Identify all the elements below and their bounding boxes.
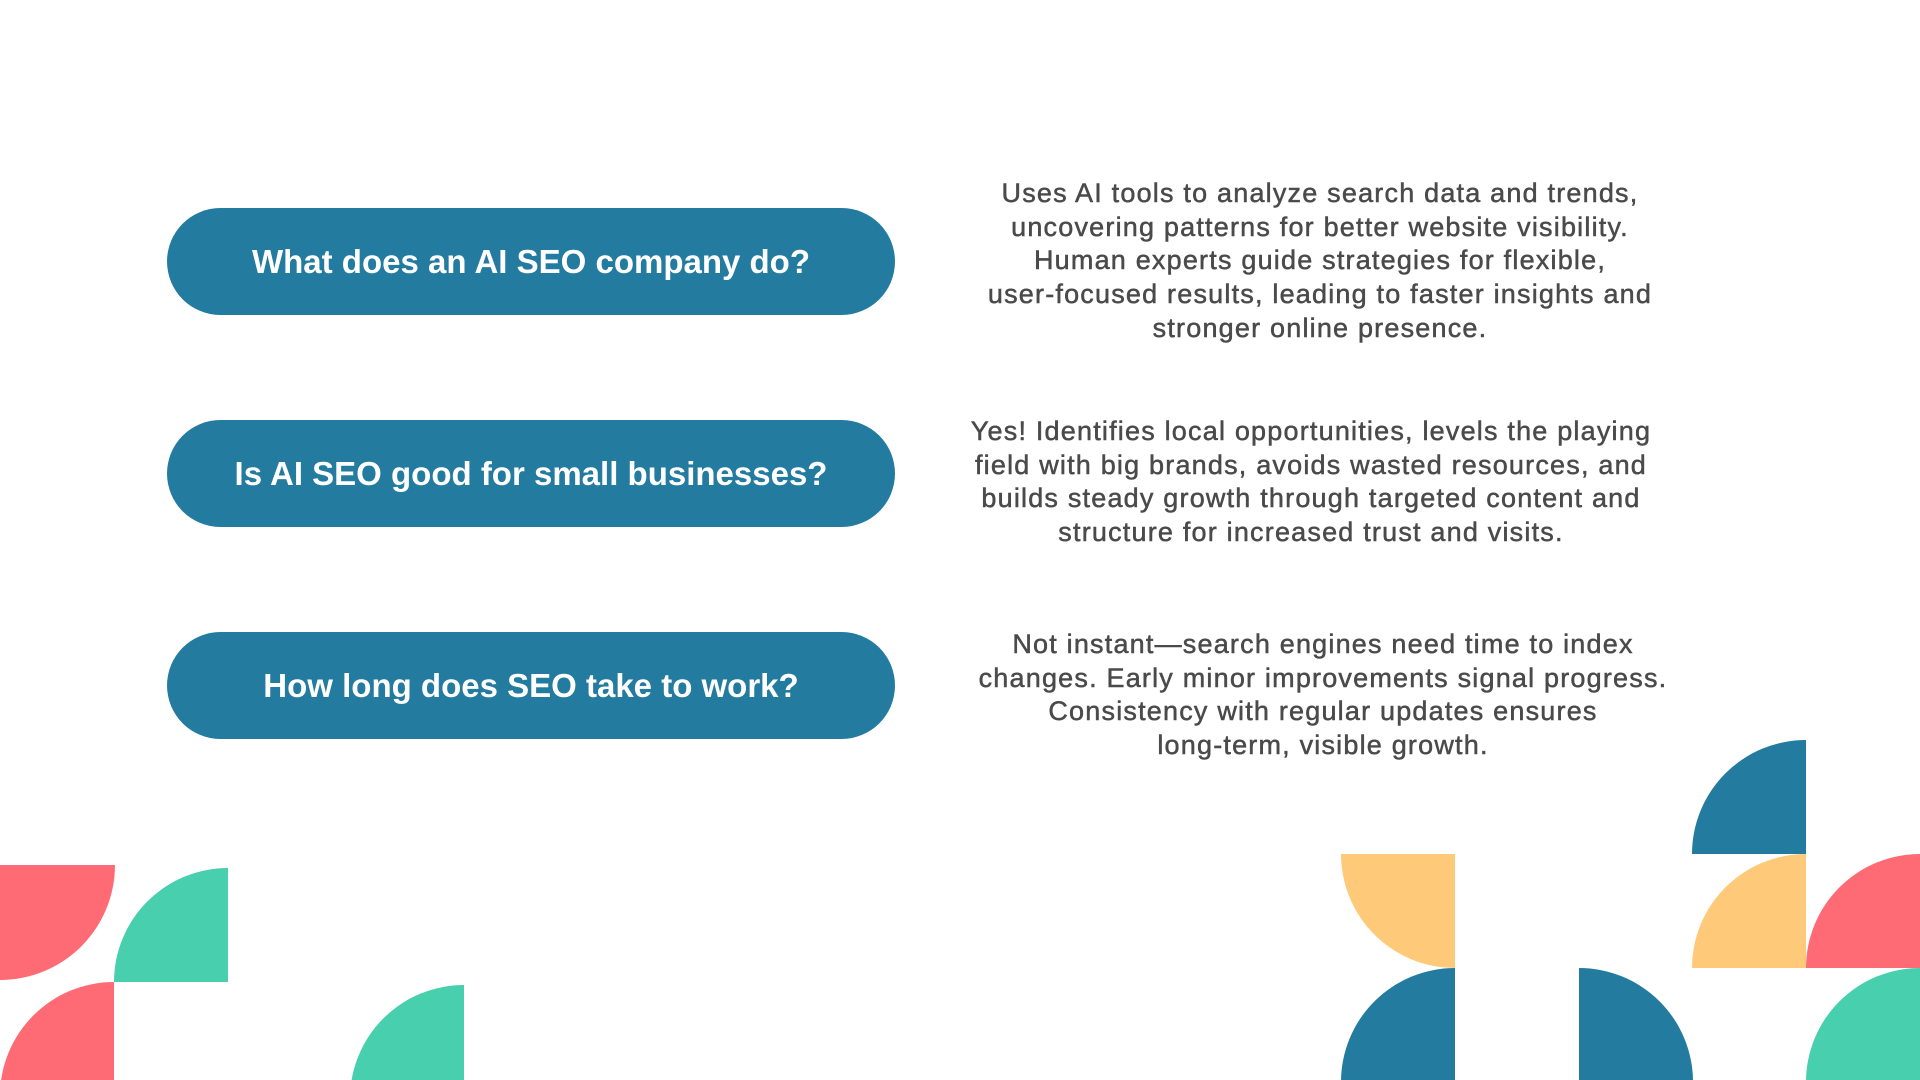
answer 1: user-focused results, leading to faster insights and bbox=[988, 279, 1652, 309]
decoration: bottom-left shapes bbox=[0, 865, 464, 1080]
answer 2: structure for increased trust and visits. bbox=[1058, 517, 1564, 547]
pill: question 3 bbox=[167, 632, 895, 739]
pill: question 2: Is AI SEO good for small businesses? bbox=[235, 454, 827, 492]
pill: question 1: What does an AI SEO company do? bbox=[252, 242, 810, 280]
pill: question 3: How long does SEO take to work? bbox=[263, 666, 799, 704]
answer 1: stronger online presence. bbox=[1153, 313, 1487, 343]
answer 1 bbox=[988, 178, 1652, 343]
answer 2: field with big brands, avoids wasted resources, and bbox=[975, 450, 1647, 480]
answer 1: Uses AI tools to analyze search data and trends, bbox=[1002, 178, 1638, 208]
pill: question 2 bbox=[167, 420, 895, 527]
answer 2: builds steady growth through targeted content and bbox=[981, 483, 1641, 513]
answer 3: changes. Early minor improvements signal progress. bbox=[979, 663, 1667, 693]
answer 3: Consistency with regular updates ensures bbox=[1048, 696, 1598, 726]
answer 1: Human experts guide strategies for flexible, bbox=[1034, 245, 1606, 275]
answer 2: Yes! Identifies local opportunities, levels the playing bbox=[971, 416, 1651, 446]
answer 2 bbox=[971, 416, 1651, 547]
decoration: bottom-right shapes bbox=[1341, 740, 1920, 1080]
pill: question 1 bbox=[167, 208, 895, 315]
answer 3 bbox=[979, 629, 1667, 760]
answer 3: long-term, visible growth. bbox=[1157, 730, 1489, 760]
answer 3: Not instant—search engines need time to index bbox=[1012, 629, 1634, 659]
answer 1: uncovering patterns for better website visibility. bbox=[1011, 212, 1629, 242]
